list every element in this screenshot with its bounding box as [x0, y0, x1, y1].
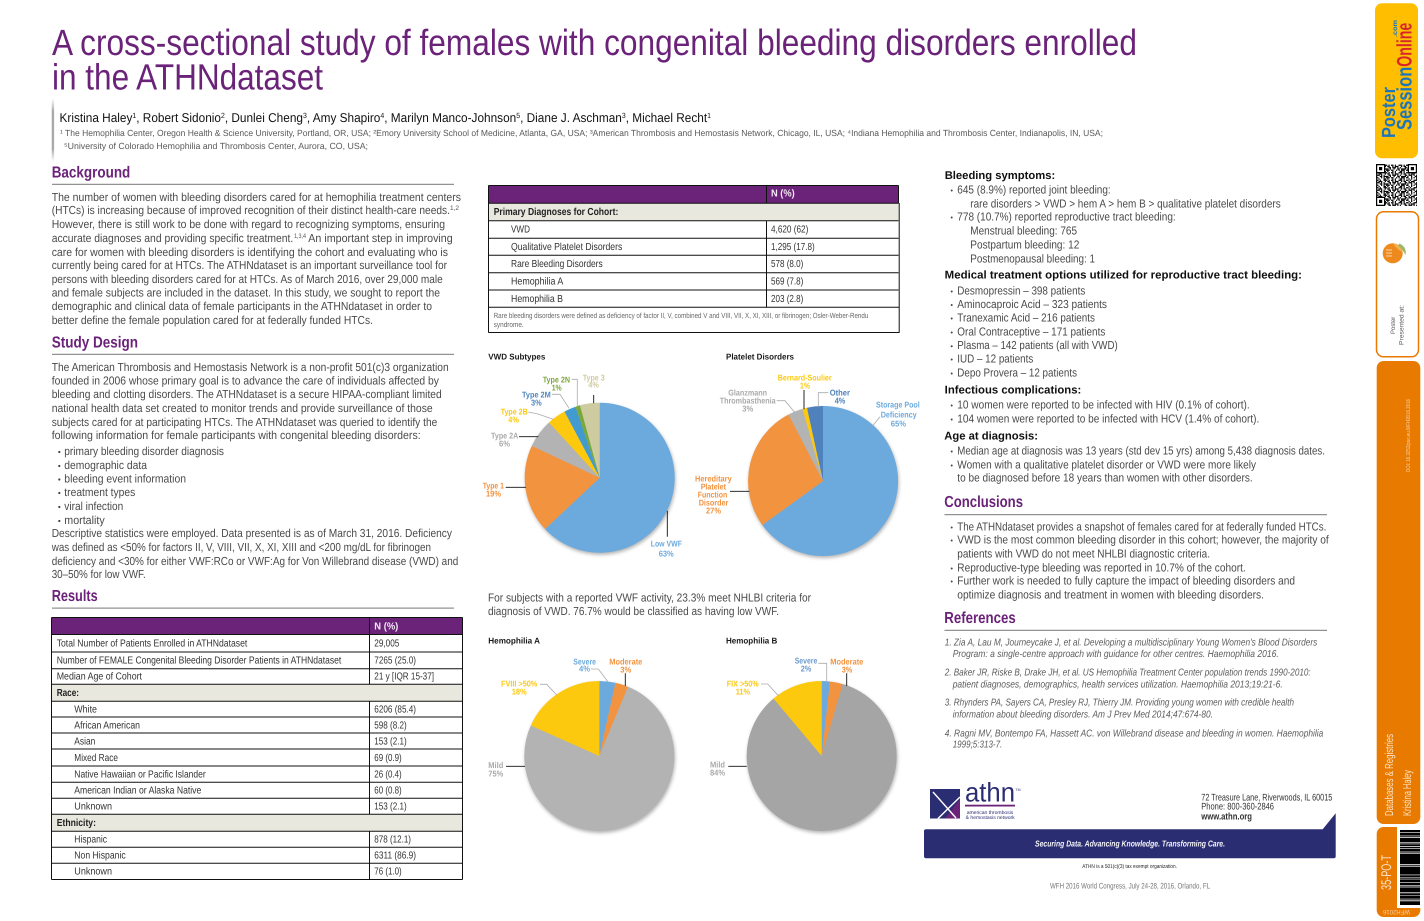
- chart: hemophilia B pie: 3%: [842, 664, 853, 674]
- bullet list: collected data: mortality: [64, 514, 105, 527]
- background text: (HTCs) is increasing because of improved recognition of their distinct health-care needs.: [52, 204, 450, 217]
- background text: persons with bleeding disorders cared for at HTCs. As of March 2016, over 29,000 male: [52, 273, 443, 286]
- text: VWF activity note: For subjects with a reported VWF activity, 23.3% meet NHLBI criteria for: [488, 592, 811, 604]
- logo: athn: TM: [1016, 788, 1021, 792]
- background text: care for women with bleeding disorders is identifying the cohort and evaluating who is: [52, 246, 448, 259]
- heading: results: Results: [52, 588, 98, 605]
- results table: 6206 (85.4): [374, 704, 416, 716]
- panel: infectious complications: [945, 385, 1259, 425]
- logo: athn: [930, 778, 1021, 821]
- text: VWF activity note: [488, 592, 811, 618]
- background text: 1,3,4: [294, 233, 306, 240]
- panel: age at diagnosis: [944, 431, 1325, 485]
- table: primary diagnoses: Primary Diagnoses for Cohort:: [494, 207, 618, 218]
- sidebar: presented at box: Poster: [1390, 316, 1397, 334]
- table: primary diagnoses: N (%): [771, 189, 795, 200]
- table footnote: Rare bleeding disorders were defined as deficiency of factor II, V, combined V and VIII, VII, X, XI, XIII, or fibrinogen; Osler-Weber-Rendu: [494, 311, 868, 320]
- chart: hemophilia B pie: Moderate: [830, 656, 864, 666]
- chart: VWD subtypes pie: 1%: [552, 382, 562, 392]
- authors: 1: [707, 111, 711, 120]
- results table: Race:: [57, 688, 79, 699]
- bullet list: collected data: viral infection: [64, 500, 123, 513]
- table: primary diagnoses: Hemophilia A: [511, 276, 563, 287]
- panel: bleeding symptoms: 778 (10.7%) reported reproductive tract bleeding:: [957, 210, 1176, 223]
- panel: conclusions: VWD is the most common bleeding disorder in this cohort; however, the majority of: [957, 533, 1329, 546]
- sidebar: presented at box: Presented at:: [1398, 305, 1406, 345]
- panel: medical treatment options: Tranexamic Acid – 216 patients: [957, 311, 1095, 324]
- heading: background: Background: [52, 164, 130, 181]
- chart: platelet disorders pie: Other: [830, 387, 851, 397]
- chart: hemophilia A pie: Mild: [488, 760, 503, 770]
- sidebar: poster session online logo: Session: [1394, 67, 1416, 130]
- sidebar: orange topic band: DOI: 10.3252/pso.eu.WFH2016.2016: [1405, 399, 1412, 472]
- panel: medical treatment options: Oral Contraceptive – 171 patients: [957, 325, 1105, 338]
- authors: Kristina Haley: [60, 110, 138, 125]
- results table: African American: [74, 720, 140, 731]
- authors: , Dunlei Cheng: [225, 110, 303, 125]
- QR code: [1376, 164, 1417, 206]
- results table: Number of FEMALE Congenital Bleeding Disorder Patients in ATHNdataset: [57, 656, 341, 666]
- background text: The number of women with bleeding disorders cared for at hemophilia treatment centers: [52, 191, 461, 204]
- background text: better define the female population cared for at federally funded HTCs.: [52, 314, 373, 327]
- panel: background: [52, 164, 461, 327]
- results table: 153 (2.1): [374, 736, 407, 747]
- conference line: WFH 2016 World Congress, July 24-28, 2016, Orlando, FL: [1050, 882, 1210, 891]
- panel: age at diagnosis: Median age at diagnosis was 13 years (std dev 15 yrs) among 5,438 diagnosis dates.: [957, 444, 1325, 457]
- chart: platelet disorders pie: Hereditary: [695, 473, 732, 483]
- chart: hemophilia A pie: 18%: [512, 686, 527, 696]
- chart: VWD subtypes pie: VWD Subtypes: [488, 351, 546, 361]
- title: A cross-sectional study of females with congenital bleeding disorders enrolled: [52, 22, 1137, 63]
- chart: hemophilia B pie: 11%: [736, 686, 750, 696]
- panel: references: References: [944, 610, 1016, 627]
- results table: 21 y [IQR 15-37]: [374, 672, 434, 682]
- sidebar: poster session online logo: [1375, 3, 1418, 158]
- panel: conclusions: The ATHNdataset provides a snapshot of females cared for at federally funded HTCs.: [957, 520, 1326, 533]
- affiliations: ¹ The Hemophilia Center, Oregon Health & Science University, Portland, OR, USA; ²Emory University School of Medicine, Atlanta, GA, USA; ³American Thrombosis and Hemostasis Network, Chicago, IL, USA; ⁴Indiana Hemophilia and Thrombosis Center, Indianapolis, IN, USA;: [60, 128, 1103, 138]
- results table: 60 (0.8): [374, 786, 402, 797]
- panel: conclusions: patients with VWD do not meet NHLBI diagnostic criteria.: [957, 548, 1210, 561]
- panel: references: Program: a single-centre approach with guidance for other centres. Haemophilia 2016.: [953, 649, 1279, 660]
- statistics text: [51, 527, 458, 581]
- table: primary diagnoses: 4,620 (62): [771, 224, 808, 236]
- study design text: following information for female participants with congenital bleeding disorders:: [52, 429, 421, 442]
- background text: demographic and clinical data of female participants in the ATHNdataset in order to: [52, 300, 432, 313]
- table: primary diagnoses: Qualitative Platelet Disorders: [511, 242, 622, 253]
- address block: 72 Treasure Lane, Riverwoods, IL 60015: [1201, 792, 1332, 803]
- sidebar: poster session online logo: .com: [1392, 20, 1399, 37]
- bullet list: collected data: [58, 445, 224, 527]
- sidebar: presented at box: [1376, 212, 1418, 357]
- panel: conclusions: Further work is needed to fully capture the impact of bleeding disorders and: [957, 574, 1295, 587]
- address block: [1200, 792, 1332, 822]
- results table: Unknown: [74, 867, 112, 878]
- panel: references: patient diagnoses, demographics, health services utilization. Haemophilia 2013;19:21-6.: [952, 680, 1283, 691]
- sidebar: orange topic band: Kristina Haley: [1402, 770, 1414, 816]
- authors: 3: [622, 111, 626, 120]
- chart: platelet disorders pie: Bernard-Soulier: [778, 372, 832, 382]
- results table: 76 (1.0): [374, 867, 402, 878]
- chart: VWD subtypes pie: Type 2M: [522, 389, 551, 399]
- banner: tagline: [924, 813, 1336, 858]
- heading: study design: Study Design: [52, 334, 138, 351]
- table: primary diagnoses: 203 (2.8): [771, 294, 803, 305]
- panel: study design: [51, 334, 458, 581]
- table footnote: [494, 311, 868, 329]
- study design text: The American Thrombosis and Hemostasis Network is a non-profit 501(c)3 organization: [52, 361, 449, 374]
- sidebar: poster id and barcode: WFH2016: [1383, 908, 1410, 915]
- study design text: founded in 2006 whose primary goal is to advance the care of individuals affected by: [52, 374, 439, 388]
- chart: hemophilia A pie: 3%: [620, 664, 632, 674]
- address block: www.athn.org: [1200, 812, 1252, 822]
- chart: platelet disorders pie: Platelet Disorders: [726, 351, 794, 361]
- panel: infectious complications: 10 women were reported to be infected with HIV (0.1% of cohort).: [957, 398, 1250, 411]
- table: primary diagnoses: Rare Bleeding Disorders: [511, 259, 603, 270]
- panel: references: [944, 610, 1327, 751]
- chart: VWD subtypes pie: Type 1: [483, 480, 504, 490]
- results table: Non Hispanic: [74, 851, 126, 862]
- authors: 4: [380, 111, 384, 120]
- chart: hemophilia A pie: Moderate: [609, 656, 643, 666]
- panel: bleeding symptoms: 645 (8.9%) reported joint bleeding:: [957, 183, 1111, 196]
- chart: VWD subtypes pie: 3%: [531, 397, 542, 407]
- table footnote: syndrome.: [494, 320, 524, 329]
- sidebar: poster id and barcode: [1377, 827, 1421, 917]
- background text: accurate diagnoses and providing specific treatment.: [52, 232, 293, 245]
- results table: White: [74, 704, 97, 716]
- chart: VWD subtypes pie: [483, 351, 682, 558]
- panel: age at diagnosis: Age at diagnosis:: [944, 431, 1038, 443]
- results table: Native Hawaiian or Pacific Islander: [74, 769, 206, 780]
- panel: age at diagnosis: Women with a qualitative platelet disorder or VWD were more likely: [957, 458, 1256, 471]
- panel: infectious complications: Infectious complications:: [945, 385, 1081, 397]
- results table: 7265 (25.0): [374, 656, 416, 666]
- panel: results: [52, 588, 462, 880]
- sidebar: orange topic band: Databases & Registries: [1384, 734, 1396, 816]
- background text: An important step in improving: [308, 232, 453, 245]
- text: VWF activity note: diagnosis of VWD. 76.7% would be classified as having low VWF.: [488, 605, 779, 618]
- authors: 2: [221, 111, 225, 120]
- chart: platelet disorders pie: Platelet: [701, 482, 726, 492]
- sidebar: poster session online logo: Online: [1394, 23, 1416, 67]
- panel: conclusions: Conclusions: [944, 494, 1023, 511]
- results table: Unknown: [74, 802, 112, 813]
- chart: platelet disorders pie: Storage Pool: [876, 399, 920, 409]
- table: primary diagnoses: 1,295 (17.8): [771, 242, 815, 253]
- panel: conclusions: Reproductive-type bleeding was reported in 10.7% of the cohort.: [957, 561, 1246, 574]
- authors: 3: [303, 111, 307, 120]
- chart: hemophilia B pie: Severe: [795, 655, 818, 665]
- table: primary diagnoses: 569 (7.8): [771, 276, 803, 287]
- table: primary diagnoses: VWD: [511, 224, 530, 236]
- chart: VWD subtypes pie: Type 2B: [501, 406, 528, 416]
- panel: references: 1. Zia A, Lau M, Journeycake J, et al. Developing a multidisciplinary Young Women's Blood Disorders: [945, 638, 1317, 649]
- background text: and female subjects are included in the dataset. In this study, we sought to report the: [52, 287, 440, 300]
- statistics text: deficiency and <30% for either VWF:RCo or VWF:Ag for Von Willebrand disease (VWD) and: [52, 555, 458, 568]
- authors: 1: [132, 111, 136, 120]
- chart: hemophilia B pie: FIX >50%: [727, 678, 759, 688]
- results table: 598 (8.2): [374, 720, 407, 731]
- bullet list: collected data: bleeding event information: [64, 472, 186, 486]
- results table: 29,005: [374, 638, 400, 650]
- panel: bleeding symptoms: Postmenopausal bleeding: 1: [970, 252, 1095, 265]
- chart: platelet disorders pie: 3%: [742, 403, 754, 413]
- results table: Median Age of Cohort: [57, 672, 142, 682]
- sidebar: orange topic band: [1377, 361, 1420, 824]
- chart: VWD subtypes pie: 63%: [659, 548, 674, 558]
- panel: references: 2. Baker JR, Riske B, Drake JH, et al. US Hemophilia Treatment Center population trends 1990-2010:: [944, 668, 1311, 679]
- panel: conclusions: optimize diagnosis and treatment in women with bleeding disorders.: [957, 588, 1264, 601]
- chart: platelet disorders pie: 1%: [800, 380, 810, 390]
- background text: currently being cared for at HTCs. The ATHNdataset is an important surveillance tool for: [52, 259, 447, 272]
- panel: medical treatment options: IUD – 12 patients: [957, 352, 1033, 365]
- chart: hemophilia B pie: 2%: [801, 663, 812, 673]
- study design text: national health data set created to monitor trends and provide surveillance of those: [52, 402, 433, 415]
- sidebar: poster id and barcode: 35-PO-T: [1378, 855, 1394, 890]
- chart: VWD subtypes pie: 4%: [588, 380, 599, 390]
- chart: hemophilia A pie: [488, 636, 675, 833]
- study design text: subjects cared for at participating HTCs. The ATHNdataset was queried to identify the: [52, 416, 437, 429]
- accent bar beside authors: [52, 98, 54, 162]
- results table: N (%): [374, 621, 398, 632]
- results table: Total Number of Patients Enrolled in ATHNdataset: [57, 638, 247, 650]
- title: in the ATHNdataset: [52, 56, 323, 98]
- results table: [52, 618, 462, 880]
- panel: bleeding symptoms: [945, 170, 1281, 265]
- panel: references: 1999;5:313-7.: [953, 740, 1002, 751]
- chart: platelet disorders pie: 4%: [835, 395, 846, 405]
- statistics text: 30–50% for low VWF.: [52, 568, 146, 581]
- results table: 878 (12.1): [374, 835, 411, 846]
- chart: platelet disorders pie: [695, 351, 920, 558]
- affiliations: [60, 128, 1103, 151]
- statistics text: Descriptive statistics were employed. Data presented is as of March 31, 2016. Deficiency: [52, 527, 452, 540]
- panel: medical treatment options: Plasma – 142 patients (all with VWD): [957, 339, 1118, 352]
- panel: bleeding symptoms: rare disorders > VWD > hem A > hem B > qualitative platelet disorders: [970, 197, 1281, 210]
- bullet list: collected data: primary bleeding disorder diagnosis: [64, 445, 224, 458]
- panel: medical treatment options: Medical treatment options utilized for reproductive tract bleeding:: [945, 270, 1302, 282]
- bullet list: collected data: demographic data: [64, 459, 147, 472]
- chart: hemophilia A pie: 4%: [579, 664, 590, 674]
- chart: platelet disorders pie: Disorder: [699, 497, 729, 507]
- results table: Mixed Race: [74, 753, 118, 764]
- authors: 5: [516, 111, 520, 120]
- chart: platelet disorders pie: 65%: [891, 418, 907, 428]
- panel: infectious complications: 104 women were reported to be infected with HCV (1.4% of cohort).: [957, 412, 1259, 425]
- chart: hemophilia A pie: 75%: [488, 768, 504, 778]
- chart: platelet disorders pie: Thrombasthenia: [720, 396, 776, 406]
- authors: , Michael Recht: [626, 110, 708, 125]
- chart: VWD subtypes pie: Type 2A: [491, 431, 518, 441]
- address block: Phone: 800-360-2846: [1201, 801, 1274, 812]
- panel: conclusions: [944, 494, 1329, 601]
- chart: VWD subtypes pie: 6%: [499, 438, 510, 448]
- chart: hemophilia B pie: 84%: [710, 767, 725, 777]
- study design text: bleeding and clotting disorders. The ATHNdataset is a secure HIPAA-compliant limited: [52, 388, 442, 401]
- panel: references: information about bleeding disorders. Am J Prev Med 2014;47:674-80.: [953, 710, 1213, 721]
- chart: VWD subtypes pie: 19%: [486, 488, 501, 498]
- chart: VWD subtypes pie: Low VWF: [651, 538, 682, 548]
- background text: However, there is still work to be done with regard to recognizing symptoms, ensuring: [52, 218, 445, 231]
- panel: age at diagnosis: to be diagnosed before 18 years than women with other disorders.: [957, 472, 1253, 485]
- panel: medical treatment options: Aminocaproic Acid – 323 patients: [957, 298, 1107, 311]
- chart: platelet disorders pie: Function: [698, 489, 727, 499]
- logo: athn: athn: [965, 778, 1015, 808]
- table: primary diagnoses: [488, 186, 900, 332]
- icon: congress orange logo: [1383, 243, 1406, 263]
- chart: hemophilia B pie: Hemophilia B: [726, 636, 777, 646]
- affiliations: ⁵University of Colorado Hemophilia and Thrombosis Center, Aurora, CO, USA;: [64, 141, 368, 151]
- results table: 69 (0.9): [374, 753, 402, 764]
- results table: American Indian or Alaska Native: [74, 786, 202, 797]
- logo: athn: & hemostasis network: [966, 815, 1015, 821]
- chart: hemophilia A pie: Hemophilia A: [488, 636, 540, 646]
- results table: 6311 (86.9): [374, 851, 416, 862]
- statistics text: was defined as <50% for factors II, V, VIII, VII, X, XI, XIII and <200 mg/dL for fibrinogen: [51, 541, 431, 554]
- chart: VWD subtypes pie: Type 3: [583, 372, 605, 382]
- chart: platelet disorders pie: 27%: [706, 505, 721, 515]
- panel: medical treatment options: Desmopressin – 398 patients: [957, 284, 1085, 297]
- panel: bleeding symptoms: Menstrual bleeding: 765: [970, 224, 1077, 237]
- background text: 1,2: [450, 205, 459, 212]
- results table: Ethnicity:: [57, 818, 96, 829]
- results table: Asian: [74, 736, 95, 747]
- title: [52, 22, 1137, 98]
- chart: VWD subtypes pie: 4%: [508, 414, 519, 424]
- study design text: [52, 361, 449, 442]
- table: primary diagnoses: Hemophilia B: [511, 294, 563, 305]
- bullet list: collected data: treatment types: [64, 486, 135, 499]
- chart: platelet disorders pie: Glanzmann: [728, 388, 767, 398]
- chart: hemophilia B pie: Mild: [710, 759, 725, 769]
- chart: hemophilia A pie: FVIII >50%: [501, 678, 538, 688]
- chart: platelet disorders pie: Deficiency: [881, 409, 917, 419]
- banner: tagline: Securing Data. Advancing Knowledge. Transforming Care.: [1035, 838, 1225, 848]
- sidebar: poster session online logo: Poster: [1379, 86, 1400, 138]
- authors: , Marilyn Manco-Johnson: [384, 110, 516, 125]
- table: primary diagnoses: 578 (8.0): [771, 259, 803, 270]
- results table: 153 (2.1): [374, 802, 407, 813]
- authors: , Robert Sidonio: [136, 110, 221, 125]
- chart: VWD subtypes pie: Type 2N: [543, 374, 570, 384]
- note: tax exempt: ATHN is a 501(c)(3) tax exempt organization.: [1082, 864, 1177, 870]
- background text: [52, 191, 461, 327]
- logo: athn: american thrombosis: [967, 810, 1014, 816]
- panel: medical treatment options: [945, 270, 1302, 379]
- authors: , Amy Shapiro: [307, 110, 380, 125]
- panel: bleeding symptoms: Postpartum bleeding: 12: [970, 238, 1079, 251]
- chart: hemophilia B pie: [710, 636, 898, 833]
- panel: references: 3. Rhynders PA, Sayers CA, Presley RJ, Thierry JM. Providing young women with credible health: [945, 698, 1294, 709]
- chart: hemophilia A pie: Severe: [573, 656, 596, 666]
- results table: 26 (0.4): [374, 769, 402, 780]
- panel: medical treatment options: Depo Provera – 12 patients: [957, 366, 1077, 379]
- authors: , Diane J. Aschman: [520, 110, 622, 125]
- panel: bleeding symptoms: Bleeding symptoms:: [945, 170, 1055, 182]
- panel: references: 4. Ragni MV, Bontempo FA, Hassett AC. von Willebrand disease and bleeding in women. Haemophilia: [945, 729, 1324, 740]
- results table: Hispanic: [74, 835, 107, 846]
